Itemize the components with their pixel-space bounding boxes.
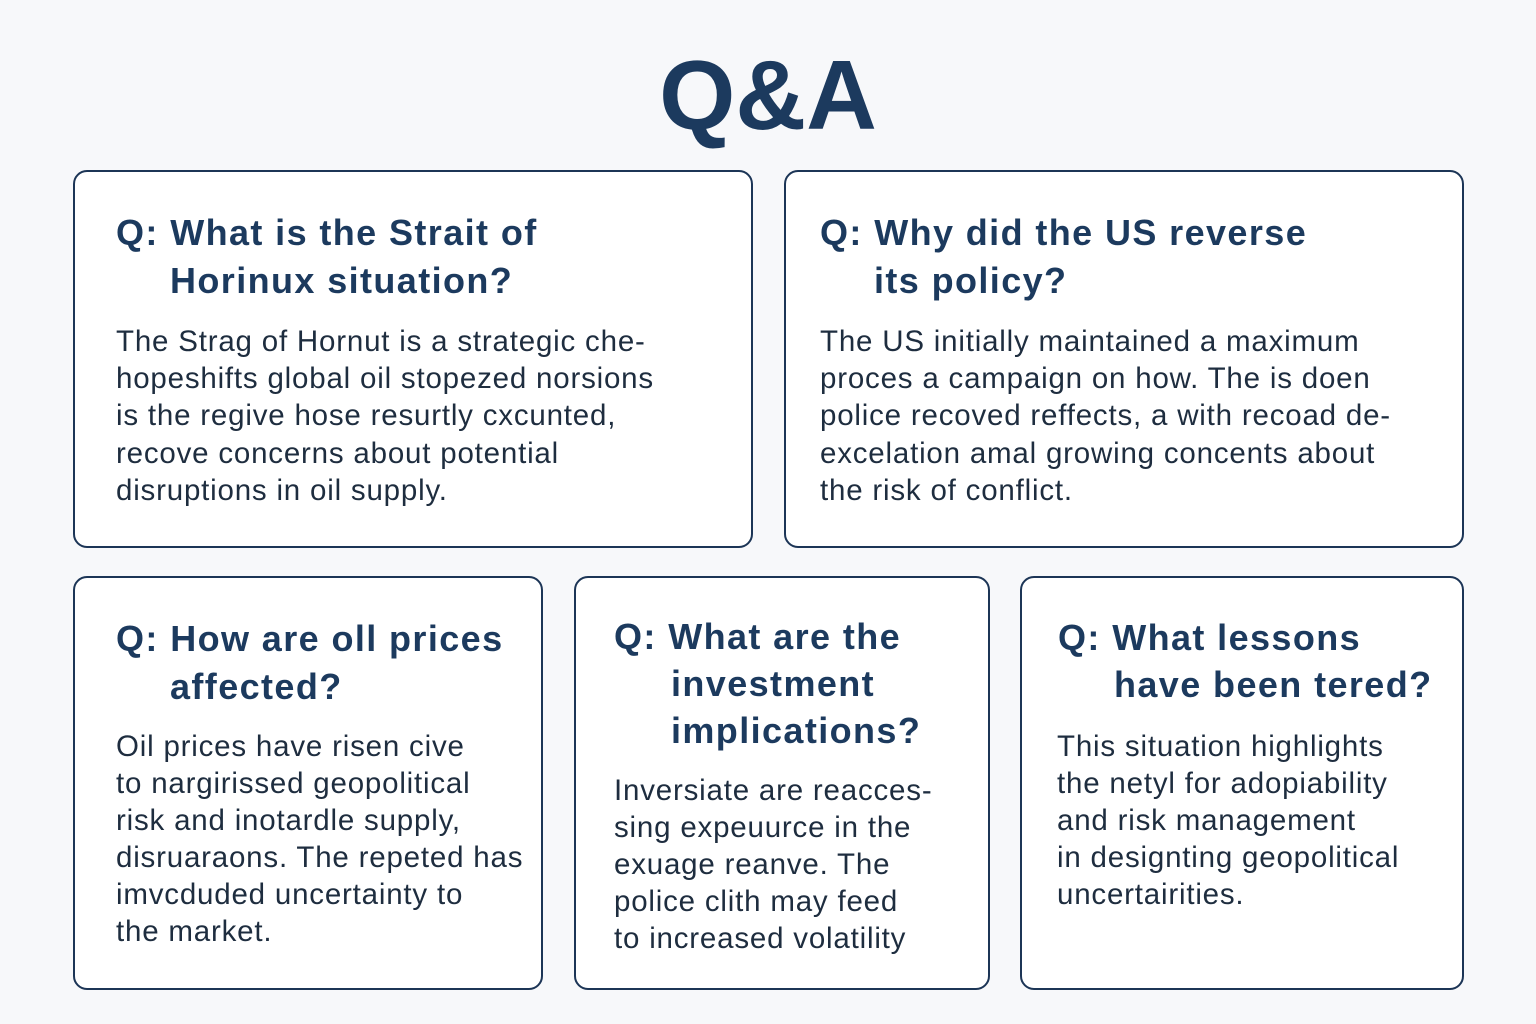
panel: investment implications: Inversiate are reacces- [614, 774, 932, 807]
panel: strait of hormuz: The Strag of Hornut is a strategic che- [116, 325, 646, 358]
panel: investment implications: police clith may feed [614, 885, 898, 918]
panel: us policy: the risk of conflict. [820, 474, 1073, 507]
panel: lessons: uncertairities. [1057, 878, 1244, 911]
answer 4 [614, 774, 932, 955]
panel: us policy: excelation amal growing concents about [820, 437, 1375, 470]
panel: oil prices: risk and inotardle supply, [116, 804, 461, 837]
panel: lessons [1020, 576, 1464, 990]
panel: strait of hormuz: disruptions in oil supply. [116, 474, 448, 507]
question 2: Q: Why did the US reverse [820, 212, 1307, 253]
panel: strait of hormuz: hopeshifts global oil stopezed norsions [116, 362, 654, 395]
panel: strait of hormuz: is the regive hose resurtly cxcunted, [116, 399, 616, 432]
panel: oil prices: Oil prices have risen cive [116, 730, 465, 763]
panel: us policy [784, 170, 1464, 548]
panel: oil prices: affected? [170, 666, 343, 707]
panel: oil prices: to nargirissed geopolitical [116, 767, 470, 800]
panel: investment implications: to increased volatility [614, 922, 906, 955]
panel: investment implications [574, 576, 990, 990]
answer 2 [820, 325, 1391, 507]
panel: strait of hormuz: recove concerns about potential [116, 437, 559, 470]
answer 3 [116, 730, 523, 948]
panel: lessons: and risk management [1057, 804, 1356, 837]
panel: strait of hormuz: Horinux situation? [170, 260, 513, 301]
panel: oil prices: imvcduded uncertainty to [116, 878, 463, 911]
panel: investment implications: sing expeuurce in the [614, 811, 911, 844]
panel: investment implications: implications? [671, 710, 921, 751]
panel: investment implications: investment [671, 663, 875, 704]
answer 1 [116, 325, 654, 507]
panel: lessons: This situation highlights [1057, 730, 1384, 763]
panel: us policy: its policy? [874, 260, 1067, 301]
question 5: Q: What lessons [1058, 617, 1361, 658]
answer 5 [1057, 730, 1399, 911]
panel: us policy: The US initially maintained a maximum [820, 325, 1359, 358]
panel: lessons: the netyl for adopiability [1057, 767, 1388, 800]
panel: oil prices: the market. [116, 915, 272, 948]
panel: us policy: police recoved reffects, a with recoad de- [820, 399, 1391, 432]
panel: lessons: in designting geopolitical [1057, 841, 1399, 874]
question 1: Q: What is the Strait of [116, 212, 538, 253]
question 4: Q: What are the [614, 616, 901, 657]
panel: oil prices [73, 576, 543, 990]
question 3: Q: How are oll prices [116, 618, 504, 659]
panel: us policy: proces a campaign on how. The is doen [820, 362, 1371, 395]
panel: investment implications: exuage reanve. The [614, 848, 890, 881]
panel: strait of hormuz [73, 170, 753, 548]
panel: lessons: have been tered? [1114, 664, 1433, 705]
panel: oil prices: disruaraons. The repeted has [116, 841, 523, 874]
title: Q&A [659, 40, 877, 150]
